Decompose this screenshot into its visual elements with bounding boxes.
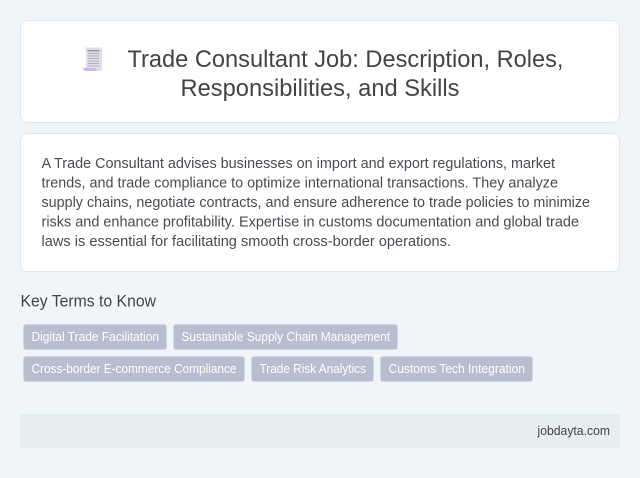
tag: customs tech integration: Customs Tech Integration — [388, 362, 525, 376]
tags: key terms — [24, 324, 532, 382]
panel: description card — [20, 134, 620, 272]
tag: digital trade facilitation: Digital Trade Facilitation — [32, 330, 159, 344]
tag: sustainable supply chain management: Sustainable Supply Chain Management — [182, 330, 390, 344]
description text: risks and enhance profitability. Expertise in customs documentation and global trade — [42, 214, 579, 230]
description text: A Trade Consultant advises businesses on import and export regulations, market — [42, 156, 555, 172]
description text: laws is essential for facilitating smooth cross-border operations. — [42, 234, 451, 250]
heading: key terms: Key Terms to Know — [20, 293, 156, 311]
tag: sustainable supply chain management — [174, 324, 398, 350]
title: Trade Consultant Job: Description, Roles, — [128, 46, 564, 73]
description text: supply chains, negotiate contracts, and ensure adherence to trade policies to minimize — [42, 195, 590, 211]
footer bar — [20, 414, 620, 448]
tag: trade risk analytics: Trade Risk Analytics — [260, 362, 366, 376]
description text — [42, 156, 590, 250]
tag: trade risk analytics — [252, 356, 374, 382]
icon: document scroll — [83, 48, 102, 71]
tag: customs tech integration — [380, 356, 532, 382]
tag: cross-border e-commerce compliance: Cross-border E-commerce Compliance — [32, 362, 236, 376]
panel: title card — [20, 20, 620, 122]
description text: trends, and trade compliance to optimize international transactions. They analyze — [42, 176, 558, 192]
title: Responsibilities, and Skills — [180, 75, 460, 102]
title — [128, 46, 564, 102]
tag: cross-border e-commerce compliance — [24, 356, 244, 382]
tag: digital trade facilitation — [24, 324, 166, 350]
footer source text: jobdayta.com — [537, 424, 610, 438]
